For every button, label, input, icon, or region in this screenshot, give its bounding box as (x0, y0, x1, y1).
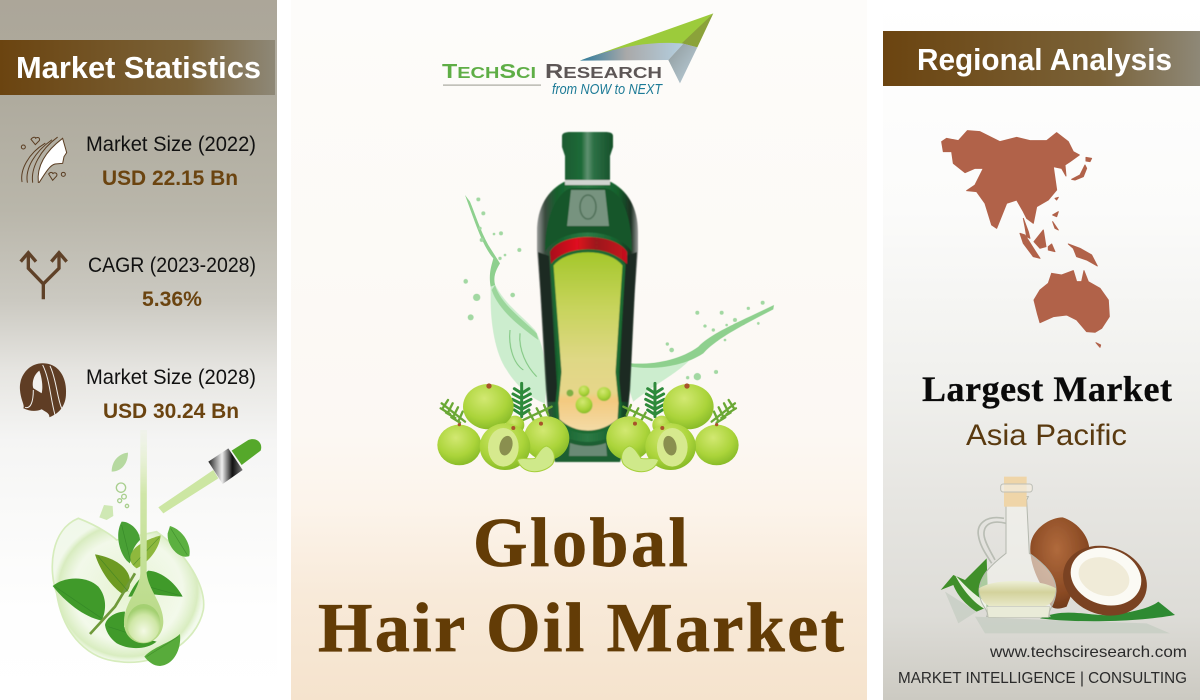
footer text (898, 644, 1187, 687)
illustration: amla fruit and ferns (437, 383, 739, 472)
bottle cap (562, 132, 613, 180)
mint leaves (53, 522, 190, 666)
heading band: Regional Analysis (883, 31, 1200, 86)
label (552, 251, 624, 432)
logo: TechSci Research (442, 13, 713, 98)
green leaf (941, 558, 988, 612)
text: largest market (922, 369, 1172, 452)
bottle base (555, 436, 620, 462)
label fruits (566, 386, 611, 414)
falling drop (124, 430, 163, 643)
emblem (567, 190, 609, 226)
heading band: Market Statistics (0, 40, 275, 95)
logo: TechSci Research: RESEARCH (545, 61, 662, 83)
panel: centre product (291, 0, 867, 700)
illustration: oil splash (463, 195, 774, 403)
stat: market size 2022 (86, 133, 256, 190)
footer text: MARKET INTELLIGENCE | CONSULTING (898, 670, 1187, 687)
bubble (52, 518, 204, 662)
panel: market statistics (0, 0, 277, 700)
red arc (550, 237, 627, 264)
cork (1004, 477, 1027, 507)
fruit stems (458, 383, 718, 430)
text: largest market: Asia Pacific (966, 419, 1127, 452)
logo mark (580, 13, 713, 83)
icon: diverging arrows (21, 253, 67, 299)
stat: CAGR: CAGR (2023-2028) (88, 254, 256, 277)
footer text: www.techsciresearch.com (989, 644, 1187, 661)
stat: market size 2028 (86, 366, 256, 423)
bottle neck band (565, 179, 610, 185)
stat: market size 2028: Market Size (2028) (86, 366, 256, 389)
whole coconut (1030, 517, 1089, 609)
illustration: coconut oil jug (941, 477, 1175, 633)
stat: market size 2022: Market Size (2022) (86, 133, 256, 156)
ferns (441, 383, 736, 423)
jug (979, 497, 1056, 617)
illustration: herbal oil droplet and dropper (52, 430, 261, 666)
small bubbles (116, 483, 129, 508)
stat: CAGR (88, 254, 256, 311)
illustration: bottle (537, 132, 638, 462)
bottle body (537, 181, 638, 462)
icon: hair profile with hearts (21, 137, 67, 182)
map: Asia Pacific (942, 131, 1109, 347)
dark side strips (538, 252, 637, 402)
text: largest market: Largest Market (922, 369, 1172, 409)
heading band: Regional Analysis: Regional Analysis (917, 42, 1172, 77)
title: Hair Oil Market (318, 590, 844, 667)
stat: market size 2028: USD 30.24 Bn (103, 400, 239, 423)
stat: CAGR: 5.36% (142, 288, 202, 311)
floating leaf (112, 453, 128, 472)
heading band: Market Statistics: Market Statistics (16, 50, 261, 85)
bottle shoulder arch (545, 188, 632, 252)
half coconut (1054, 535, 1156, 626)
dropper tube (158, 470, 218, 513)
panel: regional analysis (883, 0, 1200, 700)
fruits (506, 416, 524, 434)
icon: long hair woman (20, 363, 66, 417)
stat: market size 2022: USD 22.15 Bn (102, 167, 238, 190)
title: Global (473, 505, 688, 582)
logo: TechSci Research: from NOW to NEXT (552, 81, 664, 98)
leaf reflection (945, 592, 1170, 633)
title (318, 505, 844, 667)
cut fruit slices (488, 428, 519, 467)
logo: TechSci Research: TECH SCI (442, 61, 536, 83)
